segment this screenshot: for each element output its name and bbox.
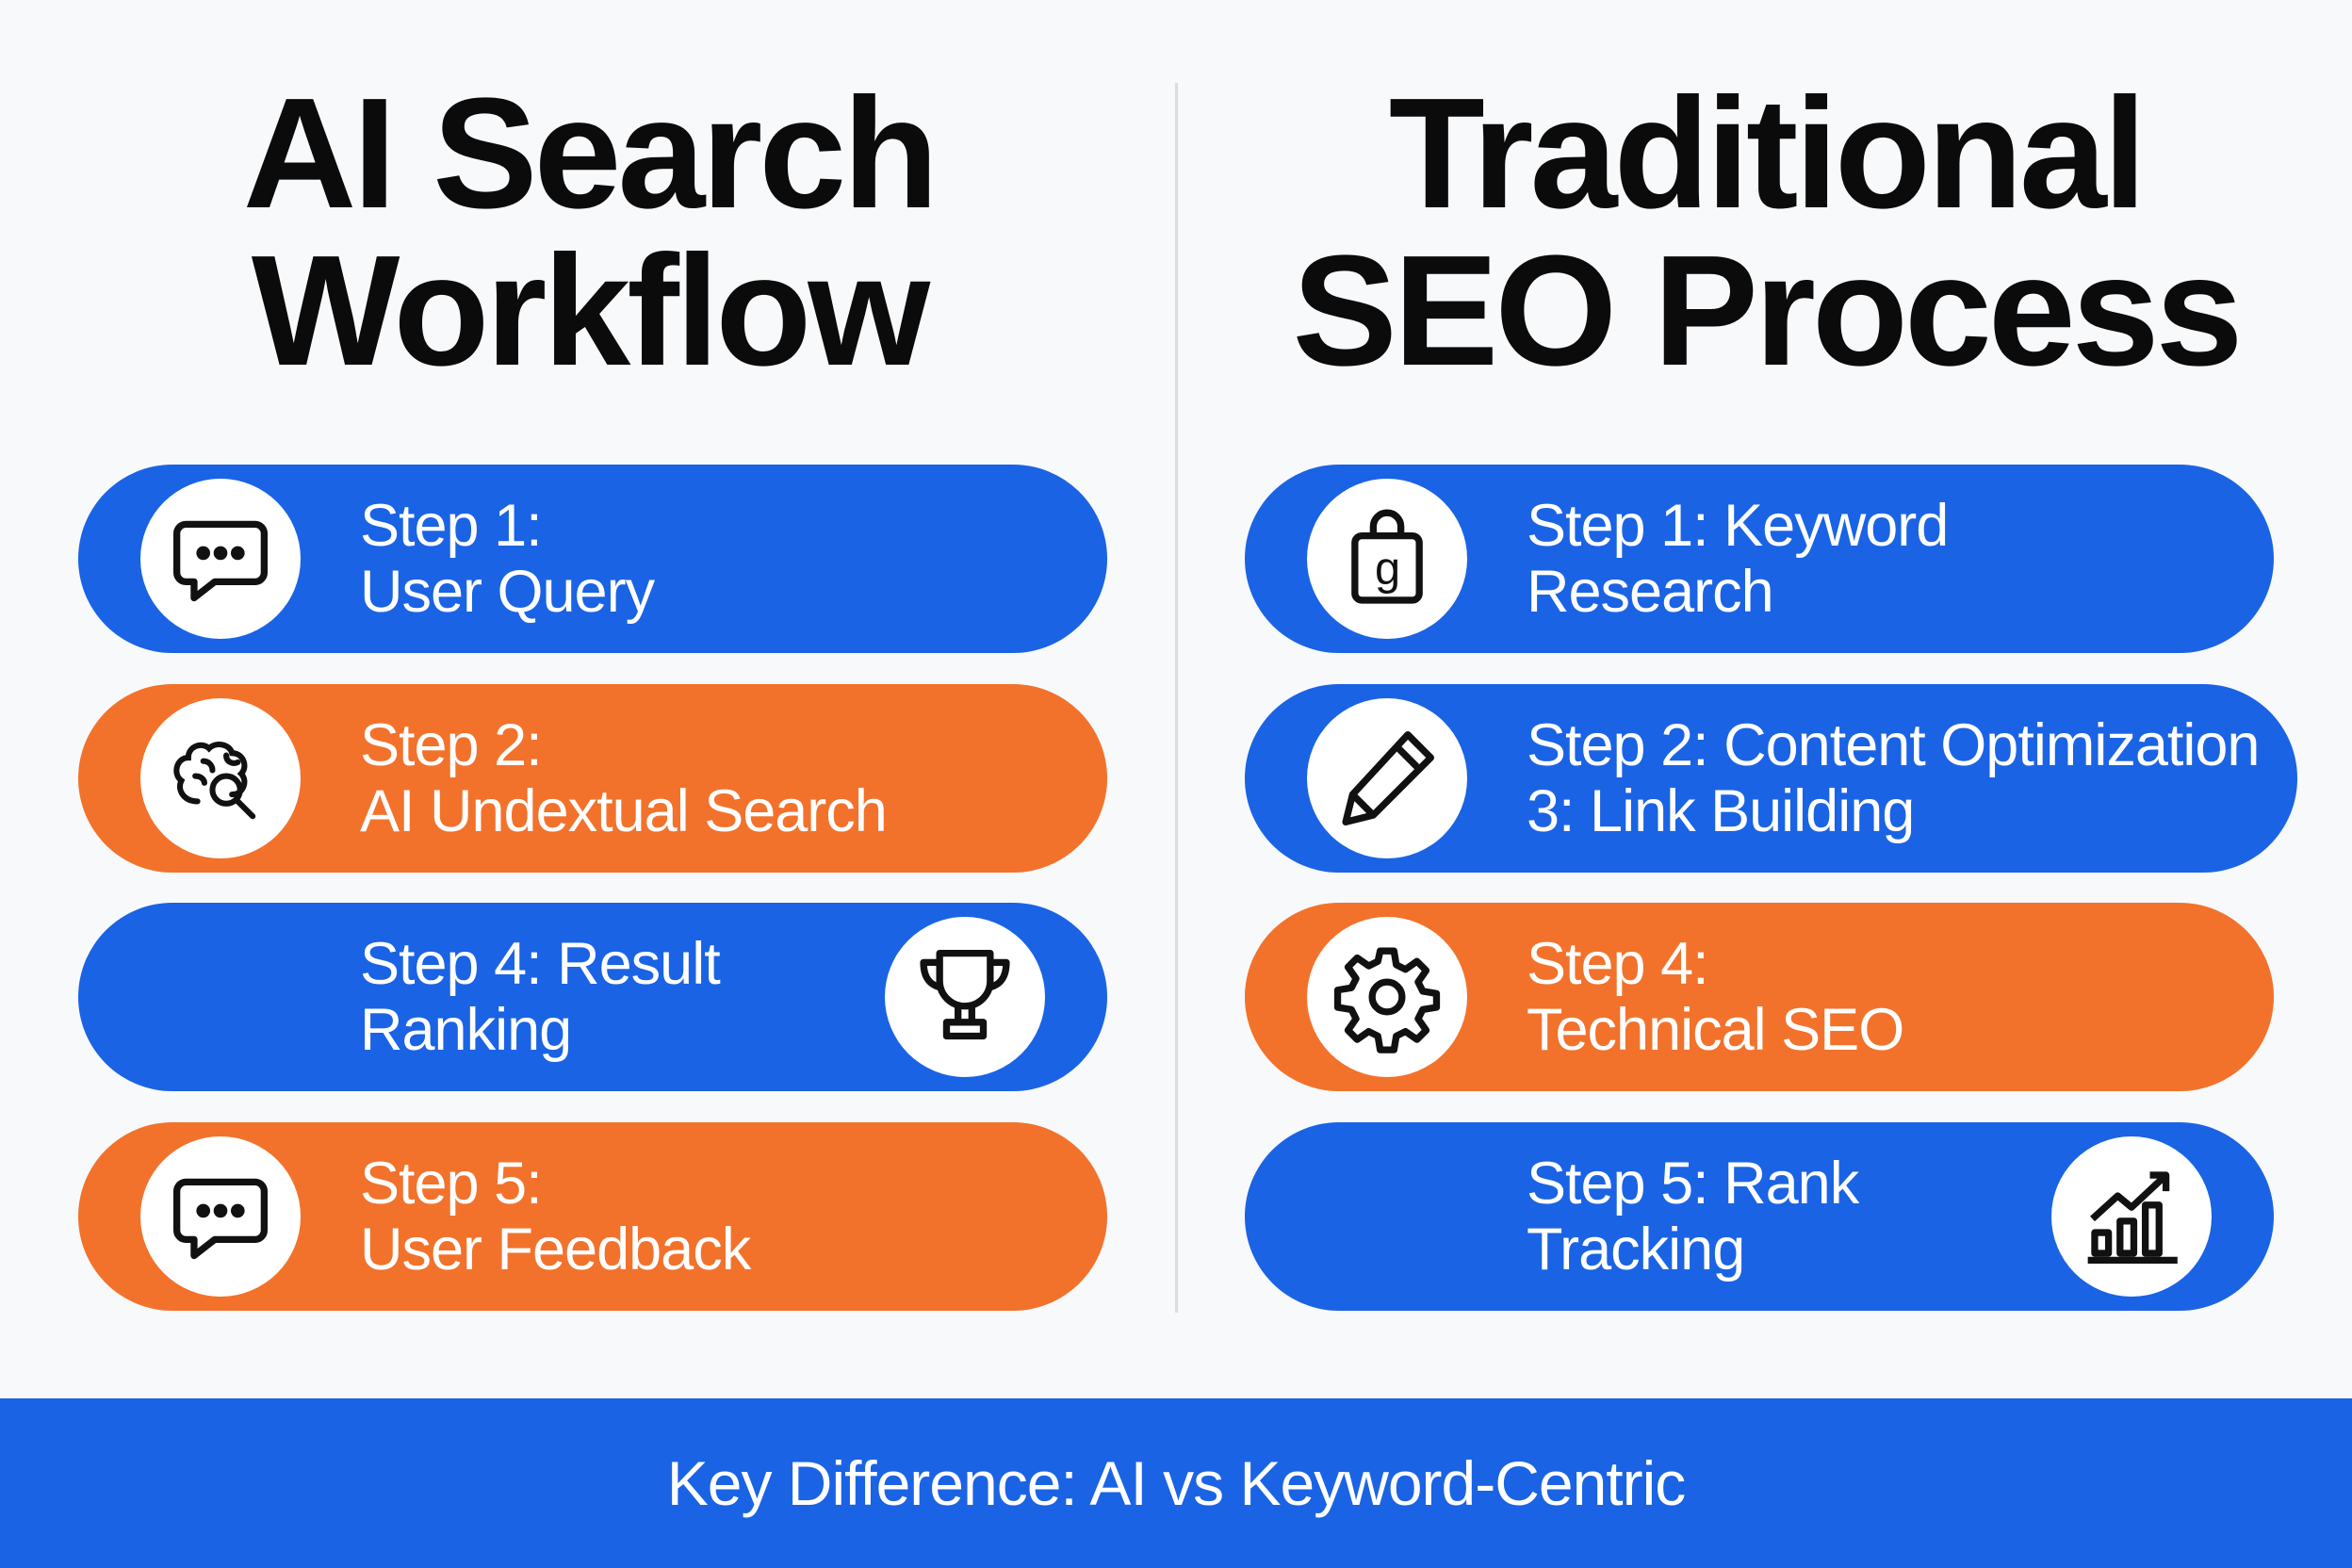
text: Step 1: — [360, 493, 542, 559]
pill: AI step 4 — [78, 903, 1107, 1091]
icon: bar chart trend — [2051, 1136, 2212, 1297]
text: Step 2: Content Optimization — [1527, 712, 2259, 778]
text: Step 2: — [360, 712, 542, 778]
pill: AI step 1 — [78, 465, 1107, 653]
text — [360, 712, 887, 844]
title: AI Search Workflow — [243, 66, 935, 399]
pill: SEO step 2 — [1245, 684, 2297, 873]
icon: shopping bag g — [1307, 479, 1467, 639]
title: Traditional SEO Process: SEO Process — [1293, 223, 2239, 399]
text — [360, 1151, 752, 1282]
icon: shopping bag g: g — [1375, 544, 1399, 595]
pill: AI step 5 — [78, 1122, 1107, 1311]
pill: SEO step 5 — [1245, 1122, 2274, 1311]
title: AI Search Workflow: AI Search — [243, 66, 935, 241]
pill: SEO step 1 — [1245, 465, 2274, 653]
pill: SEO step 4 — [1245, 903, 2274, 1091]
text: Step 4: — [1527, 931, 1708, 997]
text: Step 5: Rank — [1527, 1151, 1858, 1217]
text — [360, 931, 720, 1063]
text — [360, 493, 655, 625]
text: Step 4: Result — [360, 931, 720, 997]
banner: key difference — [0, 1398, 2352, 1568]
text: Research — [1527, 559, 1773, 625]
text: Tracking — [1527, 1217, 1744, 1282]
icon: chat bubble — [140, 1136, 301, 1297]
icon: chat bubble — [140, 479, 301, 639]
text: Ranking — [360, 997, 571, 1063]
text: AI Undextual Search — [360, 778, 887, 844]
text — [1527, 493, 1948, 625]
icon: gear — [1307, 917, 1467, 1077]
icon: pencil — [1307, 698, 1467, 858]
title: Traditional SEO Process — [1293, 66, 2239, 399]
text: Step 5: — [360, 1151, 542, 1217]
text: User Feedback — [360, 1217, 750, 1282]
icon: trophy — [885, 917, 1045, 1077]
text: Step 1: Keyword — [1527, 493, 1948, 559]
text — [1527, 931, 1903, 1063]
pill: AI step 2 — [78, 684, 1107, 873]
text: Technical SEO — [1527, 997, 1903, 1063]
text: User Query — [360, 559, 654, 625]
text — [1527, 1151, 1860, 1282]
title: AI Search Workflow: Workflow — [252, 223, 926, 399]
text: 3: Link Building — [1527, 778, 1914, 844]
title: Traditional SEO Process: Traditional — [1389, 66, 2143, 241]
banner: key difference: Key Difference: AI vs Keyword-Centric — [667, 1448, 1685, 1518]
text — [1527, 712, 2259, 844]
icon: brain search — [140, 698, 301, 858]
